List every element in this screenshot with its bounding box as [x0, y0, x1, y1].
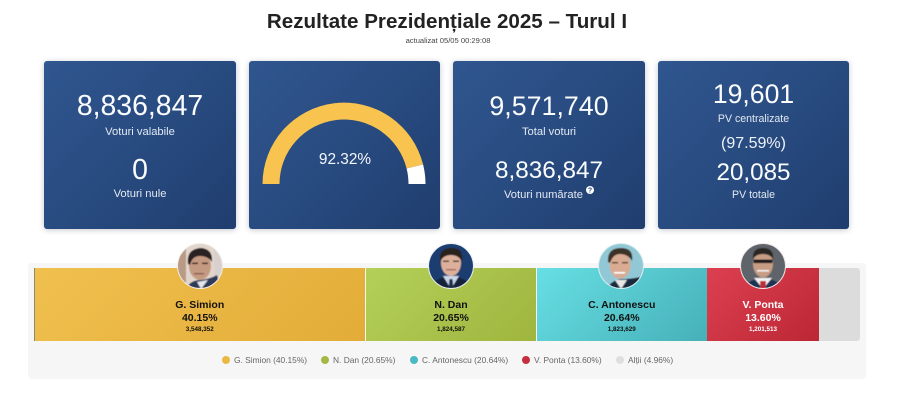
V. Ponta votes: 1,201,513: [749, 326, 777, 333]
C. Antonescu votes: 1,823,629: [608, 326, 636, 333]
legend item: C. Antonescu: C. Antonescu (20.64%): [422, 355, 508, 365]
title: Rezultate Prezidențiale 2025 – Turul I: [267, 10, 627, 33]
legend item: G. Simion: G. Simion (40.15%): [234, 355, 307, 365]
N. Dan votes: 1,824,587: [437, 326, 465, 333]
null votes number: 0: [132, 154, 148, 186]
total reports label: PV totale: [732, 189, 775, 201]
gauge chart: [262, 102, 426, 184]
legend item: N. Dan: N. Dan (20.65%): [333, 355, 395, 365]
reports percentage: (97.59%): [721, 134, 786, 152]
C. Antonescu name: C. Antonescu: [588, 299, 655, 311]
icon: N. Dan portrait: [428, 243, 474, 289]
bar segment: C. Antonescu: [537, 268, 706, 341]
C. Antonescu percent: 20.64%: [604, 312, 640, 324]
bar segment: N. Dan: [366, 268, 536, 341]
G. Simion percent: 40.15%: [182, 312, 218, 324]
V. Ponta percent: 13.60%: [745, 312, 781, 324]
total reports number: 20,085: [716, 158, 790, 186]
null votes label: Voturi nule: [114, 188, 166, 200]
counted votes label: Voturi numărate: [504, 188, 583, 200]
N. Dan name: N. Dan: [434, 299, 468, 311]
panel: polling station reports: [658, 61, 849, 229]
G. Simion votes: 3,548,352: [186, 326, 214, 333]
icon: G. Simion portrait: [177, 243, 223, 289]
counted votes number: 8,836,847: [495, 156, 603, 184]
total votes label: Total voturi: [522, 126, 576, 138]
icon: C. Antonescu portrait: [598, 243, 644, 289]
legend item: V. Ponta: V. Ponta (13.60%): [534, 355, 602, 365]
bar segment: G. Simion: [34, 268, 365, 341]
panel: valid and null votes: [44, 61, 236, 229]
panel: total and counted votes: [453, 61, 645, 229]
V. Ponta name: V. Ponta: [742, 299, 784, 311]
gauge percentage: 92.32%: [319, 150, 371, 168]
icon: V. Ponta portrait: [740, 243, 786, 289]
G. Simion name: G. Simion: [175, 299, 224, 311]
bar segment: others: [819, 268, 860, 341]
valid votes number: 8,836,847: [77, 90, 203, 122]
valid votes label: Voturi valabile: [105, 126, 175, 138]
panel: results background: [28, 263, 866, 379]
total votes number: 9,571,740: [489, 91, 609, 121]
panel: turnout gauge: [249, 61, 440, 229]
reports centralized label: PV centralizate: [718, 113, 789, 125]
update timestamp: actualizat 05/05 00:29:08: [406, 36, 490, 45]
reports centralized number: 19,601: [713, 79, 794, 109]
N. Dan percent: 20.65%: [433, 312, 469, 324]
legend item: others: Alții (4.96%): [628, 355, 673, 365]
bar segment: V. Ponta: [707, 268, 819, 341]
